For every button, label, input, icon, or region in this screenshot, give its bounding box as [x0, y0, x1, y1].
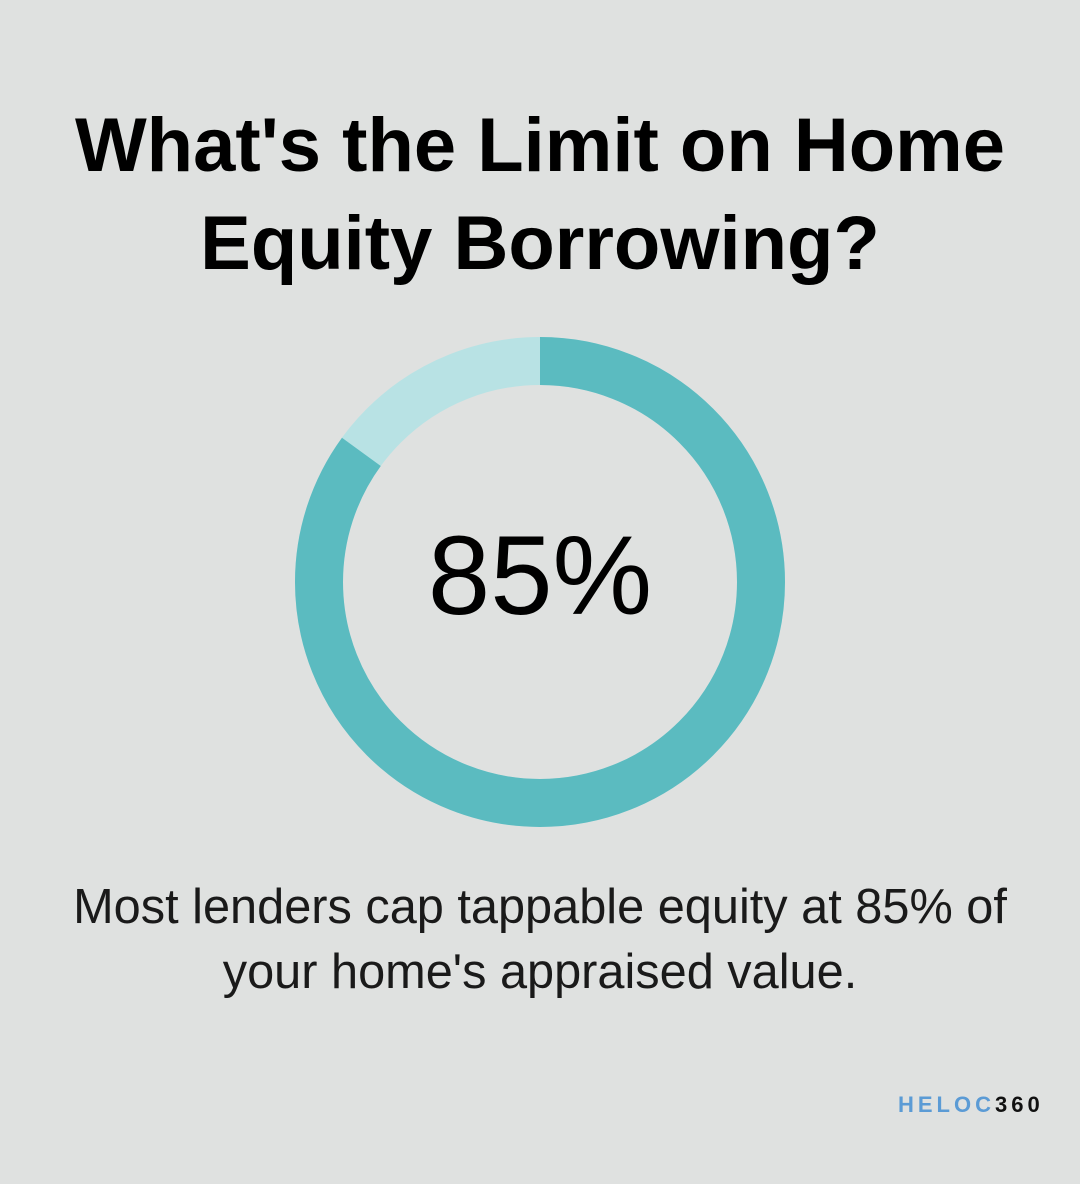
ring value (85%): [319, 361, 761, 803]
center value: 85%: [428, 513, 652, 638]
description: your home's appraised value.: [223, 945, 857, 999]
description: Most lenders cap tappable equity at 85% of: [73, 880, 1007, 934]
ring background (remaining 15%): [319, 361, 761, 803]
title: Equity Borrowing?: [200, 201, 880, 286]
logo: HELOC360: [898, 1092, 1044, 1117]
title: What's the Limit on Home: [75, 103, 1005, 188]
description: [73, 880, 1007, 999]
title: [75, 103, 1005, 286]
